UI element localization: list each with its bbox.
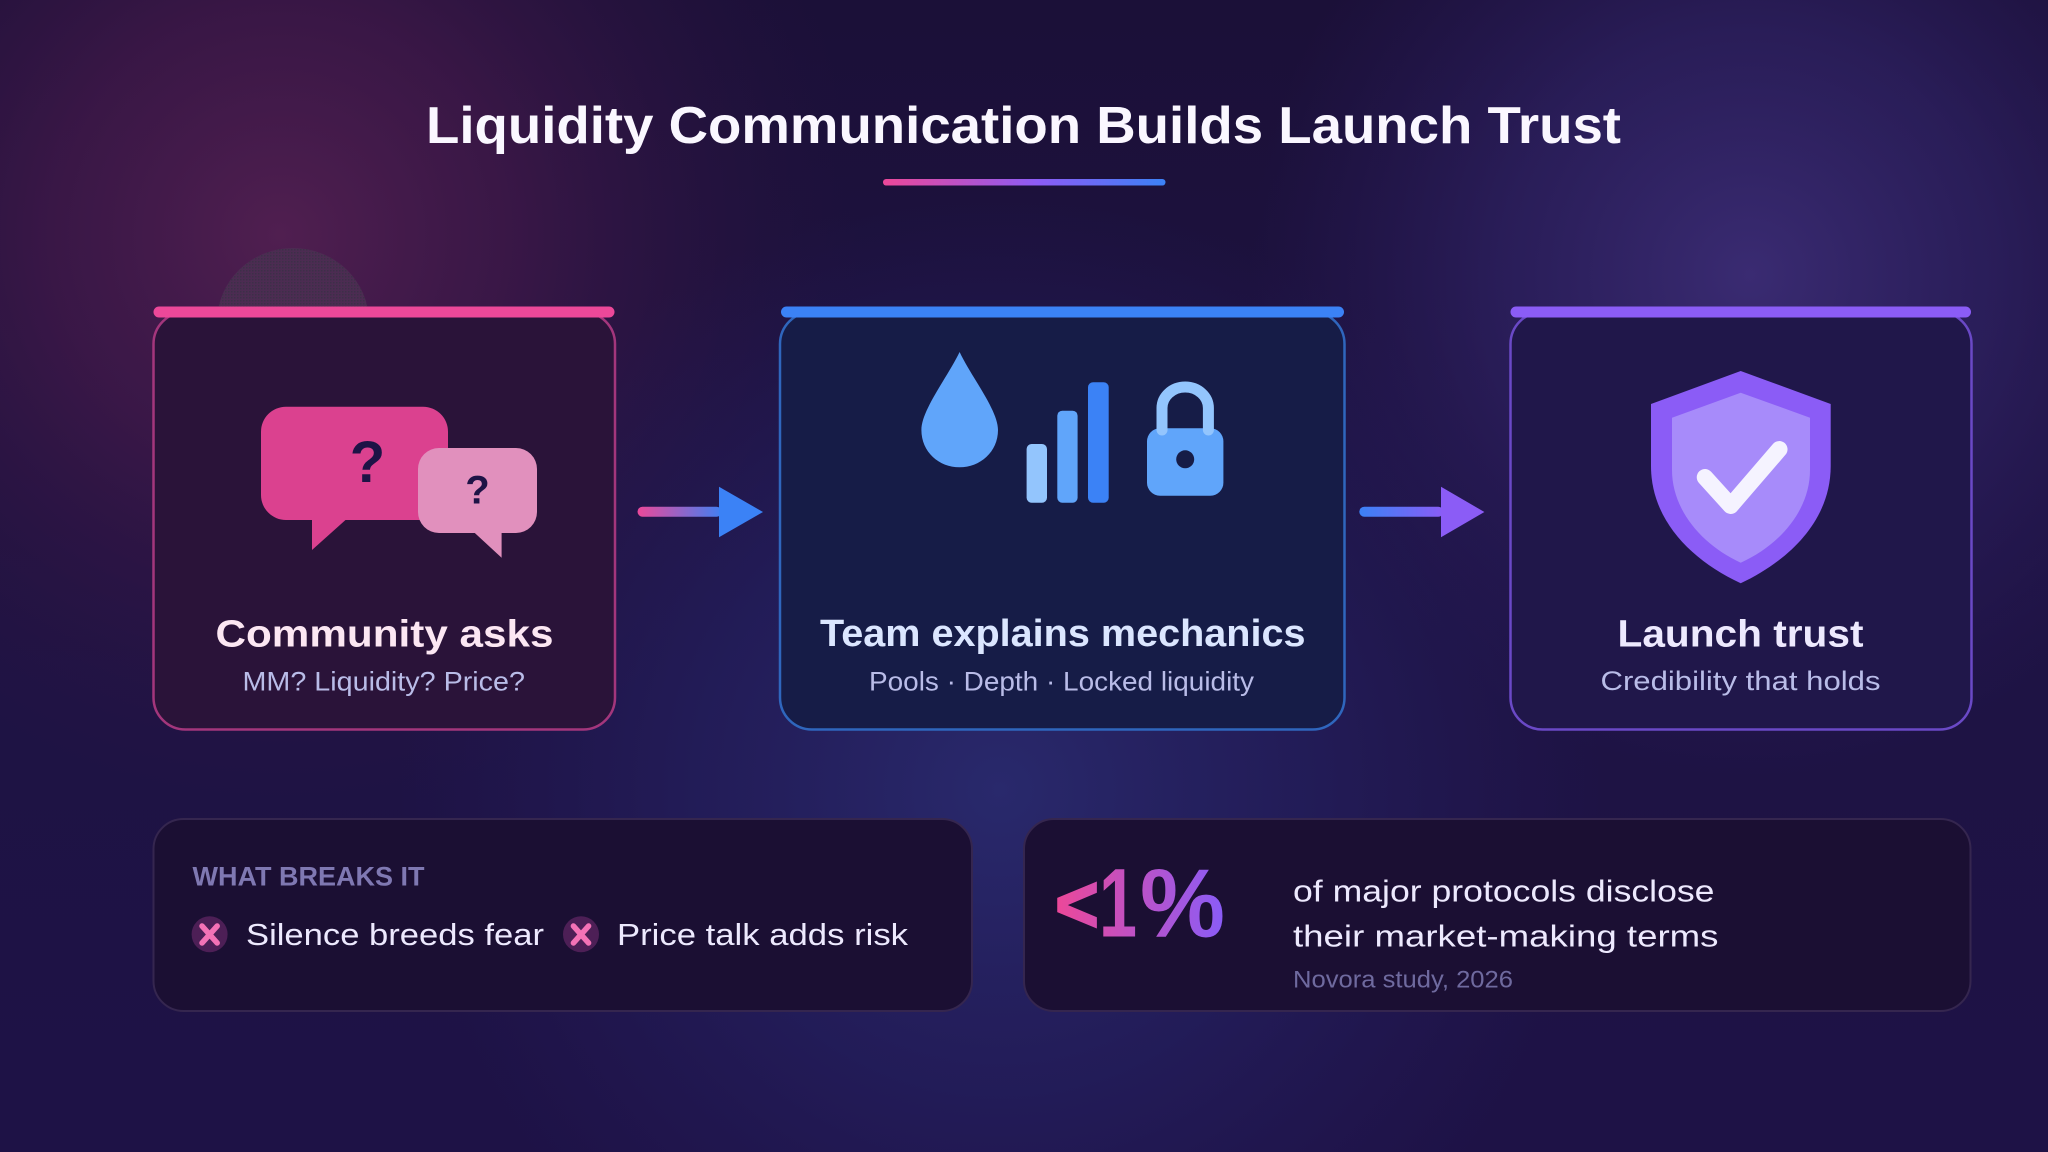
card subtext: Credibility that holds <box>1600 666 1880 696</box>
statistic description: of major protocols disclose <box>1293 874 1714 909</box>
risk one: Silence breeds fear <box>246 917 544 952</box>
panel label: WHAT BREAKS IT <box>192 862 425 892</box>
icon: shield with check <box>1651 371 1831 583</box>
title underline <box>883 179 1166 186</box>
icon: speech bubbles with question marks <box>261 407 537 558</box>
title: Liquidity Communication Builds Launch Trust <box>426 97 1621 155</box>
card heading: Community asks <box>216 614 554 656</box>
icon: depth bars <box>1027 382 1109 503</box>
dotted dome behind first card <box>217 248 369 396</box>
big statistic: % <box>1140 849 1225 958</box>
source: Novora study, 2026 <box>1293 966 1513 994</box>
big statistic <box>1055 849 1225 958</box>
panel: launch trust <box>1510 306 1972 730</box>
icon: x mark one <box>192 916 228 952</box>
card accent bar: blue <box>781 306 1344 318</box>
big statistic: 1 <box>1099 849 1137 958</box>
big statistic: < <box>1055 859 1099 950</box>
panel: community asks <box>154 306 615 730</box>
statistic description: their market-making terms <box>1293 919 1718 954</box>
card accent bar: pink <box>154 306 614 318</box>
card heading: Launch trust <box>1618 614 1864 656</box>
icon: liquidity drop <box>921 352 998 467</box>
card subtext: MM? Liquidity? Price? <box>242 666 525 696</box>
card accent bar: violet <box>1510 306 1971 318</box>
icon: padlock <box>1147 387 1223 496</box>
card heading: Team explains mechanics <box>820 613 1306 655</box>
panel: disclosure statistic <box>1024 819 1970 1011</box>
icon: x mark two <box>563 916 599 952</box>
panel: what breaks it <box>154 819 972 1011</box>
card subtext: Pools · Depth · Locked liquidity <box>869 666 1255 696</box>
risk two: Price talk adds risk <box>617 917 909 952</box>
arrow: team to trust <box>1359 487 1484 537</box>
icon: speech bubbles with question marks: ? <box>350 430 385 495</box>
panel: team explains mechanics <box>780 306 1344 730</box>
icon: speech bubbles with question marks: ? <box>465 468 490 512</box>
arrow: community to team <box>638 487 763 537</box>
